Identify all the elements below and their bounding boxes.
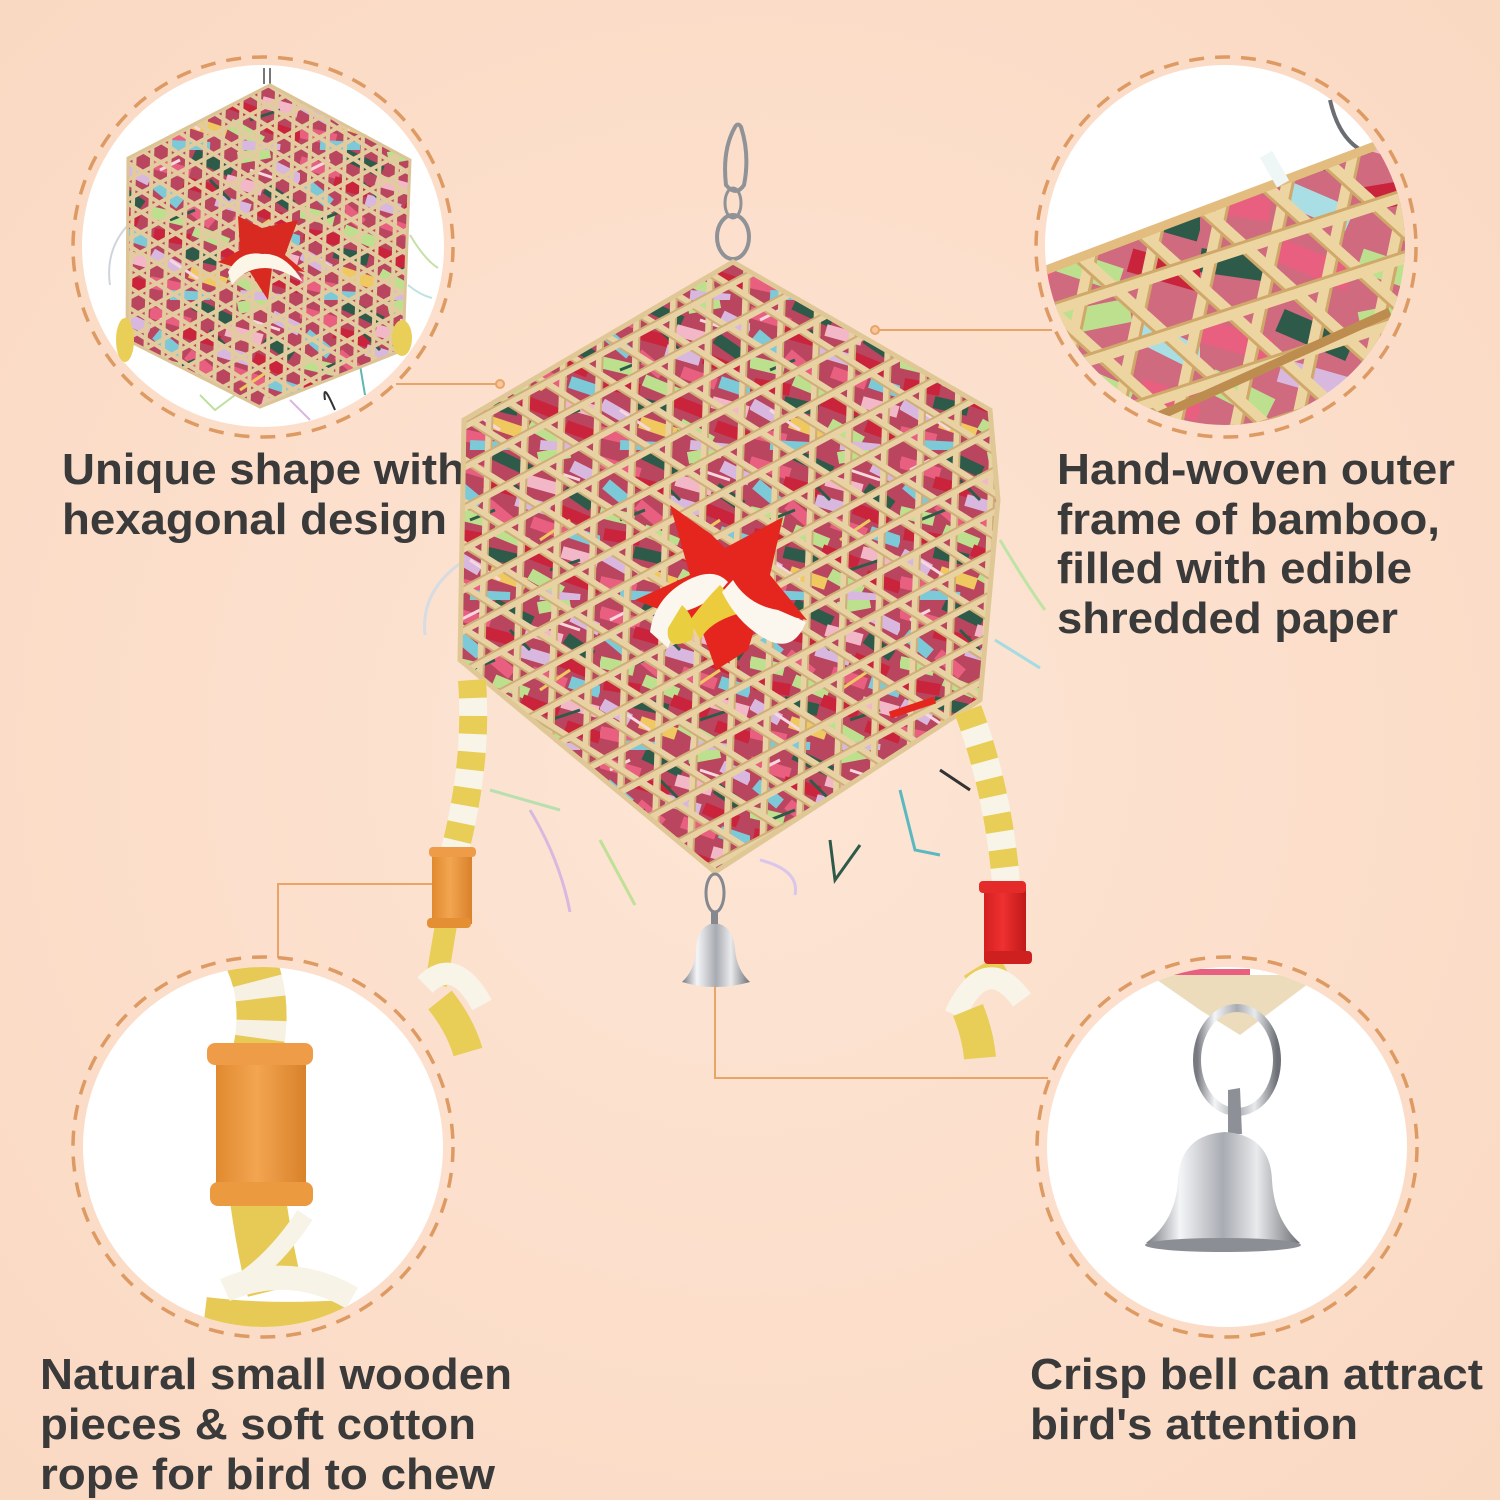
main product: hexagonal toy bbox=[424, 124, 1045, 1058]
detail circle: hexagonal toy bbox=[73, 57, 453, 437]
connector: bamboo frame callout bbox=[871, 326, 1052, 334]
detail circle: bell bbox=[1037, 957, 1417, 1337]
label: wooden pieces and rope: rope for bird to chew bbox=[40, 1450, 496, 1499]
inset: red star bbox=[218, 216, 305, 300]
label: wooden pieces and rope bbox=[40, 1350, 512, 1499]
label: hexagonal design: Unique shape with bbox=[62, 445, 465, 494]
detail circle: bamboo weave close-up bbox=[1036, 57, 1420, 440]
inset: woven bamboo with paper bbox=[1040, 146, 1420, 440]
connector: wooden piece callout bbox=[278, 884, 440, 958]
red star bbox=[635, 505, 807, 670]
orange wooden spool bbox=[427, 847, 476, 928]
carabiner hook bbox=[717, 124, 749, 259]
label: bamboo frame: Hand-woven outer bbox=[1057, 445, 1455, 494]
connector: bell callout bbox=[715, 985, 1048, 1078]
label: crisp bell: Crisp bell can attract bbox=[1030, 1350, 1483, 1399]
inset: cotton rope bbox=[205, 960, 352, 1317]
inset: orange wooden spool bbox=[207, 1043, 313, 1206]
label: wooden pieces and rope: pieces & soft cotton bbox=[40, 1400, 476, 1449]
inset: silver bell bbox=[1145, 1088, 1301, 1252]
inset: loose shreds bbox=[109, 225, 438, 420]
inset: bamboo edge bbox=[1150, 972, 1320, 1035]
label: hexagonal design bbox=[62, 445, 465, 544]
label: wooden pieces and rope: Natural small wooden bbox=[40, 1350, 512, 1399]
label: bamboo frame: frame of bamboo, bbox=[1057, 495, 1440, 544]
label: crisp bell bbox=[1030, 1350, 1483, 1449]
label: crisp bell: bird's attention bbox=[1030, 1400, 1358, 1449]
right rope bbox=[955, 710, 1022, 1058]
detail circle: wooden piece and rope bbox=[73, 957, 453, 1337]
cotton tassel bbox=[650, 574, 806, 648]
inset: hexagon woven body bbox=[127, 85, 410, 407]
label: bamboo frame bbox=[1057, 445, 1455, 643]
inset: yellow rope knots bbox=[116, 318, 412, 362]
silver bell bbox=[682, 874, 750, 987]
red stripe accent bbox=[890, 700, 935, 715]
inset: metal ring bbox=[1197, 1008, 1277, 1112]
connector: hexagonal design callout bbox=[396, 380, 504, 388]
label: hexagonal design: hexagonal design bbox=[62, 495, 447, 544]
woven bamboo body with shredded paper bbox=[460, 262, 998, 872]
left rope bbox=[425, 680, 482, 1052]
label: bamboo frame: filled with edible bbox=[1057, 544, 1412, 593]
inset: metal ring bbox=[1330, 100, 1372, 155]
red wooden spool bbox=[979, 881, 1032, 964]
stray paper shreds bbox=[424, 540, 1045, 912]
label: bamboo frame: shredded paper bbox=[1057, 594, 1398, 643]
inset: hanging loop bbox=[264, 68, 270, 84]
inset: cotton tassel bbox=[228, 253, 303, 285]
